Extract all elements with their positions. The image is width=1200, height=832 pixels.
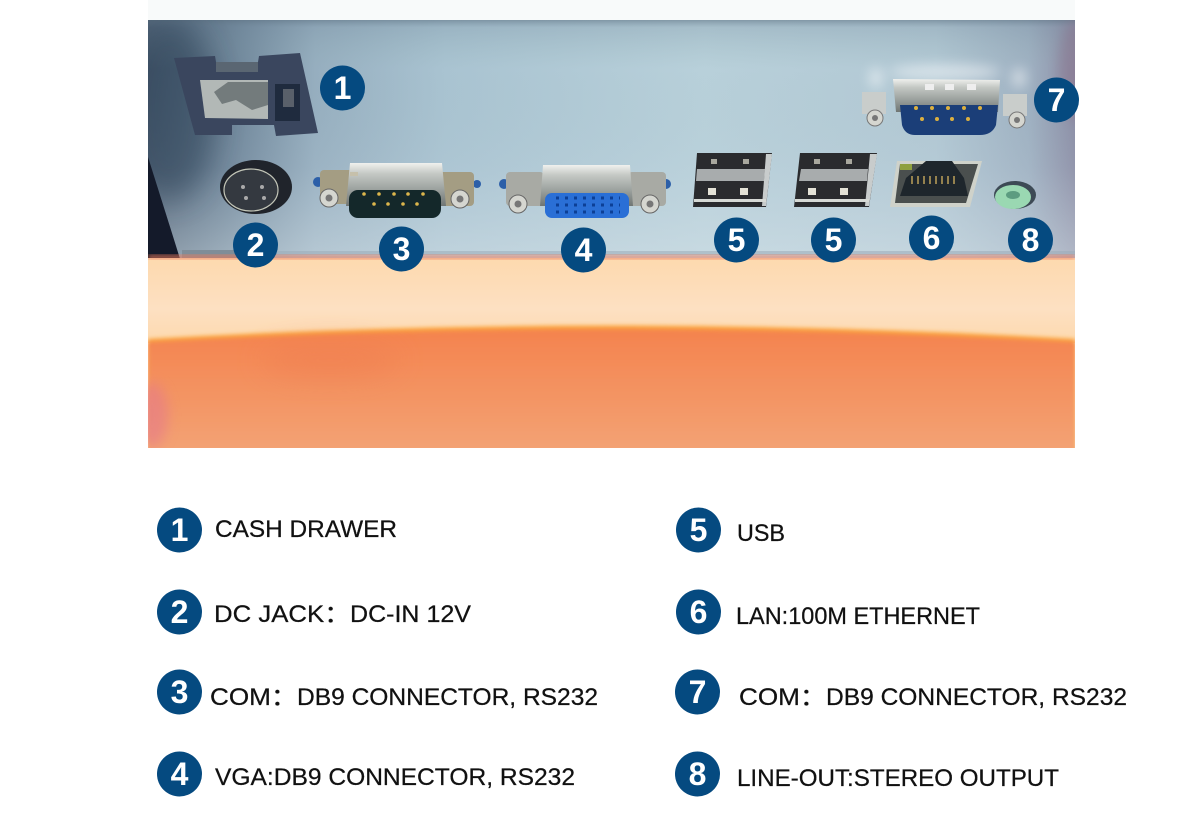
legend: USB: USB (737, 520, 785, 547)
legend: USB (676, 508, 785, 552)
callout 3 (379, 226, 424, 272)
port 8: line-out jack (994, 181, 1036, 209)
callout 6 (909, 216, 954, 260)
legend: COM: DB9 CONNECTOR, RS232 (297, 684, 598, 711)
callout 5 right: 5 (825, 222, 842, 258)
legend: COM (157, 670, 598, 714)
legend: line-out (675, 752, 1059, 796)
callout 2: 2 (247, 227, 264, 263)
legend: COM: 3 (171, 674, 188, 710)
callout 7: 7 (1048, 82, 1065, 118)
infographic (148, 20, 1126, 796)
legend: USB: 5 (690, 512, 707, 548)
legend: line-out: 8 (689, 756, 706, 792)
legend: cash drawer: CASH DRAWER (215, 516, 397, 543)
callout 1 (320, 66, 365, 110)
legend: cash drawer: 1 (171, 512, 188, 548)
callout 7 (1034, 78, 1079, 122)
port 3: COM DB9 (313, 163, 481, 218)
port 6: LAN RJ45 (890, 161, 982, 207)
legend: line-out: LINE-OUT:STEREO OUTPUT (737, 765, 1059, 792)
legend: LAN: 6 (690, 594, 707, 630)
legend: COM second: COM： (739, 684, 826, 711)
legend: LAN: LAN:100M ETHERNET (736, 603, 980, 630)
port 5: USB stack left (693, 153, 772, 207)
legend: VGA: VGA:DB9 CONNECTOR, RS232 (215, 764, 575, 791)
callout 2 (233, 222, 278, 268)
callout 6: 6 (923, 220, 940, 256)
legend: COM second (675, 670, 1127, 714)
product photo (148, 20, 1075, 448)
desk surface (148, 254, 1075, 448)
callout 4 (561, 228, 606, 272)
legend: DC jack: DC JACK： (214, 601, 350, 628)
callout 4: 4 (575, 232, 593, 268)
legend: cash drawer (157, 508, 397, 552)
callout 8: 8 (1022, 222, 1039, 258)
callout 5 left (714, 218, 759, 262)
legend: COM second: DB9 CONNECTOR, RS232 (826, 684, 1127, 711)
callout 5 right (811, 218, 856, 262)
legend: COM second: 7 (689, 674, 706, 710)
callout 1: 1 (334, 70, 351, 106)
legend: LAN (676, 590, 980, 634)
legend: DC jack: DC-IN 12V (350, 601, 471, 628)
metal back panel (125, 20, 1091, 265)
port 4: VGA (499, 165, 671, 218)
legend: VGA (157, 752, 575, 796)
callout 8 (1008, 218, 1053, 262)
callout 3: 3 (393, 231, 410, 267)
port 1: cash drawer RJ socket (174, 53, 318, 136)
port 7: COM DB9 top (862, 65, 1027, 135)
port 2: DC jack (220, 160, 292, 214)
legend: DC jack (157, 590, 471, 634)
callout 5 left: 5 (728, 222, 745, 258)
legend: VGA: 4 (171, 756, 189, 792)
legend: DC jack: 2 (171, 594, 188, 630)
legend: COM: COM： (210, 684, 297, 711)
port 5: USB stack right (794, 153, 877, 207)
